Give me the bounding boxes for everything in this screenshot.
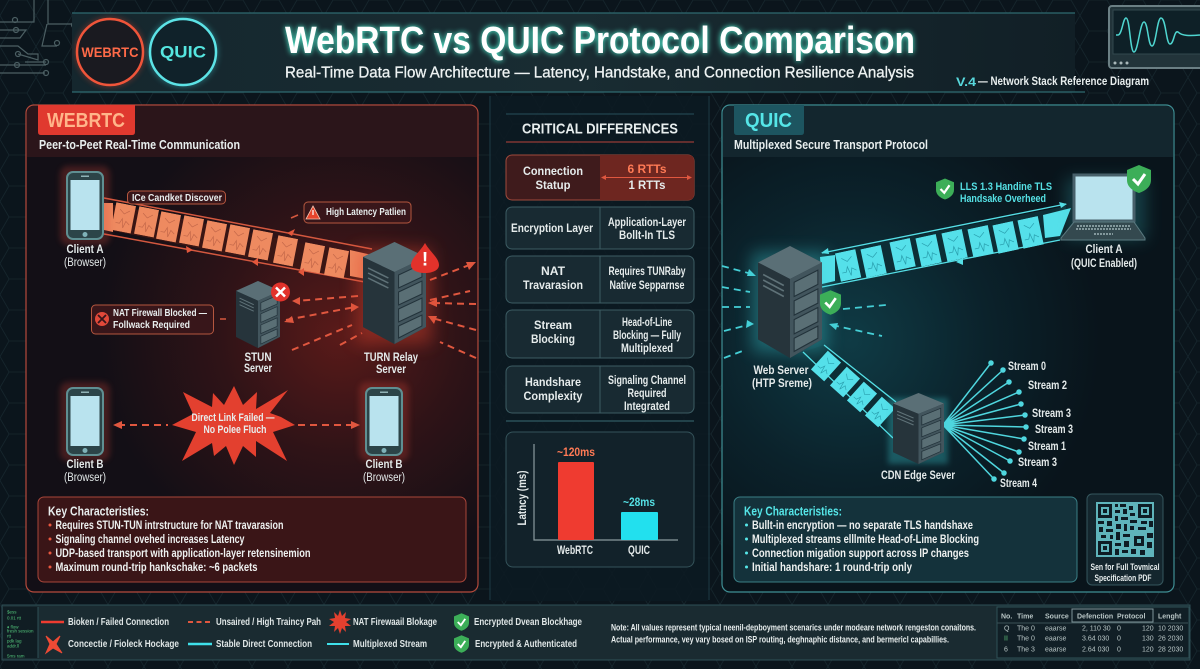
server: web server: Web Server [754,365,809,377]
row: handshake complexity: Complexity [524,389,583,403]
packet table: Lenght [1158,614,1182,620]
packet table: 28 2030 [1158,646,1183,654]
row: handshake complexity [506,366,694,413]
bar: QUIC: QUIC [628,545,650,557]
burst: direct link failed: Direct Link Failed — [192,412,274,424]
key characteristics: QUIC: Connection migation support across IP changes [752,546,969,560]
WebRTC logo [75,17,145,87]
legend: stable connection: Stable Direct Connection [216,638,312,650]
bar: WebRTC [557,447,595,557]
dashed arrows around TURN server [286,264,476,358]
icon: shield [1127,165,1151,193]
stream labels: Stream 3 [1035,424,1073,436]
device: Client B right: (Browser) [363,472,405,484]
row: stream blocking: Multiplexed [621,341,673,355]
icon: alert: ! [422,250,428,270]
panel header band [723,106,1173,157]
terminal snippet: rtt [7,634,12,638]
callout: TLS handshake [936,178,1052,205]
row: stream blocking [506,310,694,358]
callout: high latency [291,202,411,223]
icon: blocked [271,282,290,302]
packet table: II [1004,636,1008,642]
terminal snippet: $ess [7,610,17,614]
stream labels: Stream 3 [1032,408,1071,420]
callout: TLS handshake: LLS 1.3 Handine TLS [960,181,1052,193]
version note: V.4 [956,75,976,89]
QR code box: Specification PDF [1094,573,1152,583]
device: Client B left: (Browser) [64,472,106,484]
legend: high latency path: Unsaired / High Traincy Pah [216,616,321,628]
row: encryption layer: Bollt-In TLS [619,228,675,242]
bar: WebRTC: ~120ms [557,447,595,459]
stream labels: Stream 1 [1028,441,1066,453]
row: NAT traversal [506,256,694,303]
bar chart: latency: Latncy (ms) [517,470,529,526]
row: stream blocking: Head-of-Line [622,315,672,329]
WebRTC tagline: Peer-to-Peet Real-Time Communication [39,138,240,152]
device: Client A phone: Client A [66,244,104,256]
key characteristics: WebRTC: Requires STUN-TUN intrstructure for NAT travarasion [56,518,284,532]
row: connection setup: 1 RTTs [628,178,666,192]
device: Client B left [60,382,110,484]
version note [956,75,1149,89]
footer legend bar [2,605,1190,660]
packet table: No. [1001,614,1012,620]
key characteristics: WebRTC: Signaling channel ovehed increases Latency [56,532,245,546]
legend: connection blockage [46,636,179,653]
row: stream blocking: Stream [534,318,572,332]
packet table: The 0 [1017,626,1035,632]
packet table: 26 2030 [1158,636,1183,642]
callout: NAT firewall blocked [92,305,226,334]
server: CDN edge: CDN Edge Sever [881,470,955,482]
packet table: 10 2030 [1158,626,1183,632]
terminal snippet: addr.ll [7,644,19,648]
terminal snippet: ♦ flow [7,624,19,630]
bar chart: latency [506,421,694,567]
packet table: Time [1017,614,1033,620]
device: Client B right: Client B [366,459,402,471]
note: Actual performance, vey vary bosed on ISP routing, deghnaphic distance, and bermericl capabillies. [611,634,949,646]
packet table: eaarse [1045,636,1067,642]
key characteristics: WebRTC [38,497,466,582]
row: NAT traversal: Requires TUNRaby [608,264,686,278]
server: CDN edge [881,393,955,482]
packet table: 0 [1117,626,1121,632]
stream labels: Stream 4 [1000,478,1037,490]
server: STUN: STUN [244,352,272,364]
key characteristics: QUIC: Initial handshare: 1 round-trip only [752,560,912,574]
device: Client B right [359,382,409,484]
legend: high latency path [188,616,321,628]
packet table: 130 [1142,636,1154,642]
row: stream blocking: Blocking — Fully [613,328,681,342]
server: STUN: Server [244,363,272,375]
row: handshake complexity: Signaling Channel [608,373,686,387]
device: Client A laptop: Client A [1086,244,1122,256]
packet table: Q [1004,626,1010,632]
terminal snippet: fresh session [7,628,34,634]
version note: — Network Stack Reference Diagram [978,76,1149,88]
key characteristics: QUIC [734,497,1077,582]
stream labels: Stream 0 [1008,361,1046,373]
packet table: Defenction [1077,614,1113,620]
stream labels: Stream 2 [1028,380,1067,392]
device: Client A phone: (Browser) [64,257,106,269]
packet table: The 3 [1017,646,1035,654]
QUIC tab [734,105,804,135]
server: TURN relay: Server [376,364,406,376]
burst: direct link failed: No Polee Fluch [204,424,267,436]
packet table: 2.64 030 [1082,646,1109,654]
legend: multiplexed stream: Multiplexed Stream [353,638,427,650]
packet tube server to client [820,202,1071,287]
row: connection setup: Connection [523,164,583,178]
key characteristics: QUIC: Key Characteristies: [744,504,842,518]
key characteristics: WebRTC: Key Characteristies: [48,504,149,518]
WebRTC tab: WEBRTC [47,110,125,132]
packet table: 3.64 030 [1082,636,1109,642]
bar: QUIC: ~28ms [623,497,655,509]
QR code box [1087,494,1163,585]
panel: WebRTC [26,105,478,592]
callout: NAT firewall blocked: Follwack Required [113,319,190,331]
row: NAT traversal: Travarasion [523,278,583,292]
row: connection setup: 6 RTTs [628,162,667,176]
row: handshake complexity: Handshare [525,375,581,389]
terminal snippet: 0.01 rtt [7,616,22,620]
row: handshake complexity: Integrated [624,399,670,413]
title: WebRTC vs QUIC Protocol Comparison [285,20,915,62]
callout: TLS handshake: Handsake Overheed [960,193,1046,205]
legend: stable connection [188,638,312,650]
icon: shield [820,290,841,315]
row: encryption layer: Encryption Layer [511,221,593,235]
server: STUN [236,281,290,375]
legend: broken connection [41,616,169,628]
legend: encrypted blockage [454,613,582,631]
server: web server: (HTP Sreme) [752,378,812,390]
legend: encrypted blockage: Encrypted Dvean Blockhage [474,616,582,628]
callout: high latency: High Latency Patlien [326,206,406,218]
packet table: The 0 [1017,636,1035,642]
packet table: eaarse [1045,646,1067,654]
bar: WebRTC: WebRTC [557,545,593,557]
stream labels [1000,361,1073,490]
legend: NAT firewall [329,610,437,634]
device: Client B left: Client B [66,459,104,471]
packet table: Protocol [1117,614,1145,620]
packet table: 0 [1117,646,1121,654]
legend: connection blockage: Concectie / Fioleck Hockage [68,638,179,650]
row: connection setup: Statup [536,178,570,192]
terminal snippet [3,607,38,658]
WebRTC tab [38,105,135,135]
header bar [72,13,1085,92]
row: connection setup [506,155,694,200]
device: Client A laptop [1061,165,1151,270]
WebRTC logo: WEBRTC [82,44,138,60]
diagonal packet tube [803,345,896,438]
QUIC tagline: Multiplexed Secure Transport Protocol [734,138,928,152]
server: TURN relay: TURN Relay [364,352,418,364]
note [611,622,976,646]
terminal snippet: 5ms ram [7,654,25,658]
dashed arrows around web server [722,266,886,358]
packet table: 120 [1142,626,1154,632]
QUIC logo [148,17,218,87]
device: Client A phone [60,166,110,269]
panel header band [27,106,477,157]
legend: broken connection: Bioken / Failed Connection [68,616,169,628]
icon: oscilloscope monitor [1109,6,1200,68]
row: NAT traversal: Native Sepparnse [610,278,685,292]
packet table: 2, 110 30 [1082,626,1111,632]
server: web server [752,246,841,390]
row: NAT traversal: NAT [541,264,566,278]
stream labels: Stream 3 [1018,457,1057,469]
arrows: failed direct link [113,421,360,429]
bar: QUIC [621,497,658,557]
legend: encrypted authenticated [454,635,577,653]
note: Note: All values represent typical neenil-depboyment scenarics under modeare network rengeston conaitons. [611,622,976,634]
QR code box: Sen for Full Tovmical [1090,562,1160,572]
key characteristics: WebRTC: Maximum round-trip hankschake: ~6 packets [56,560,258,574]
row: stream blocking: Blocking [531,332,575,346]
packet tube A to TURN [104,198,372,282]
subtitle: Real-Time Data Flow Architecture — Latency, Handstake, and Connection Resilience Analysis [285,64,914,82]
burst: direct link failed [172,386,295,465]
key characteristics: QUIC: Multiplexed streams elllmite Head-of-Lime Blocking [752,532,979,546]
callout: ICE candidate: ICe Candket Discover [132,192,222,204]
packet table: 0 [1117,636,1121,642]
row: encryption layer [506,207,694,249]
packet table: 120 [1142,646,1154,654]
server: TURN relay [356,242,439,376]
packet table: 6 [1004,646,1008,654]
panel: QUIC [722,105,1174,592]
stream fan-out [943,361,1028,481]
row: encryption layer: Application-Layer [608,215,686,229]
legend: multiplexed stream [327,638,427,650]
packet table: eaarse [1045,626,1067,632]
row: handshake complexity: Required [628,386,666,400]
QUIC tab: QUIC [745,110,792,132]
legend: encrypted authenticated: Encrypted & Authenticated [475,638,577,650]
QUIC logo: QUIC [160,42,206,62]
key characteristics: WebRTC: UDP-based transport with application-layer retensinemion [56,546,310,560]
panel: critical differences [490,96,709,601]
packet table [997,607,1189,658]
packet table: Source [1045,614,1069,620]
key characteristics: QUIC: Bullt-in encryption — no separate TLS handshaxe [752,518,973,532]
terminal snippet: pdk lag [7,638,22,644]
legend: NAT firewall: NAT Firewaail Blokage [353,616,437,628]
device: Client A laptop: (QUIC Enabled) [1071,258,1137,270]
circuit decoration [0,0,76,76]
callout: NAT firewall blocked: NAT Firewall Blocked — [113,307,207,319]
heading: CRITICAL DIFFERENCES [522,120,678,138]
